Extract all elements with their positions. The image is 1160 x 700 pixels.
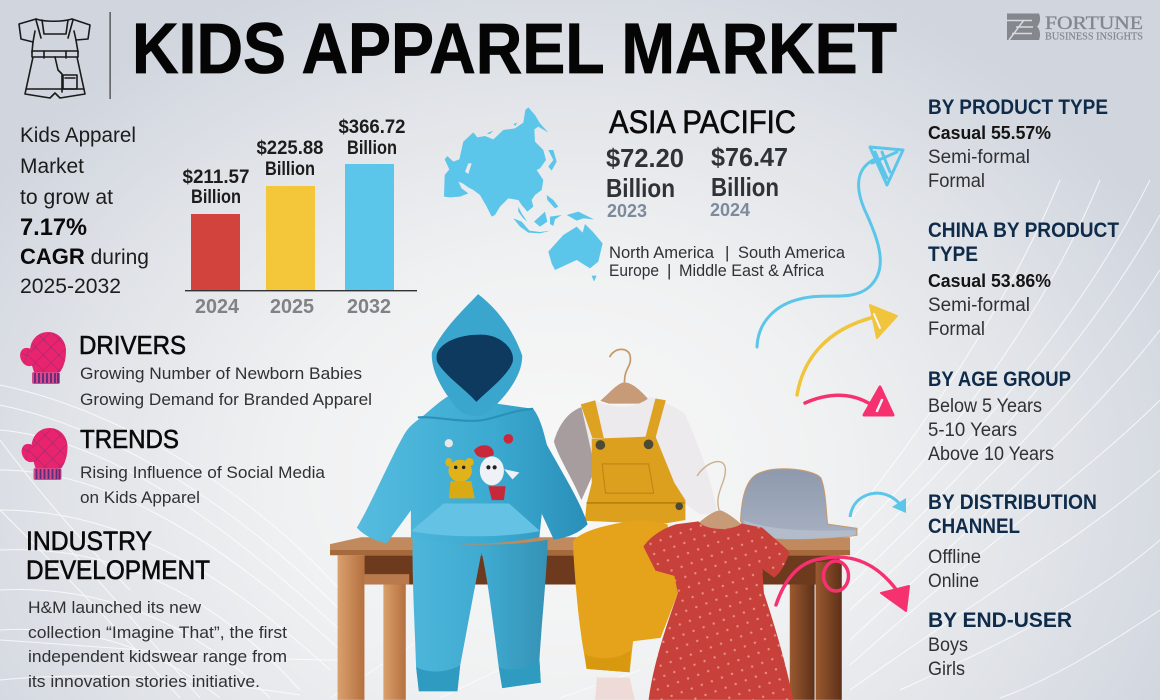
asia pacific 2024 value: 2024 xyxy=(710,200,750,220)
drivers text xyxy=(80,364,372,409)
segment: by age group: Above 10 Years xyxy=(928,444,1054,465)
industry development heading xyxy=(26,526,210,585)
CAGR text block: 2025-2032 xyxy=(20,275,121,298)
year labels: 2025 xyxy=(270,296,314,318)
other regions: South America xyxy=(738,243,846,262)
segment: by end-user: BY END-USER xyxy=(928,609,1072,632)
CAGR text block: Kids Apparel xyxy=(20,124,136,147)
segment: by end-user: Boys xyxy=(928,635,968,656)
other regions: Europe xyxy=(609,261,659,280)
segment: by distribution channel: Online xyxy=(928,571,979,592)
arrow: yellow to china by product type xyxy=(797,305,897,395)
arrow: pink to end-user xyxy=(776,557,909,611)
logo: Fortune Business Insights: BUSINESS INSIGHTS xyxy=(1045,32,1143,42)
year labels xyxy=(195,296,391,318)
segment: by age group xyxy=(928,368,1071,465)
other regions: | xyxy=(725,243,729,262)
arrow: pink to age group xyxy=(805,387,893,415)
asia pacific 2024 value: Billion xyxy=(711,172,779,202)
bar chart xyxy=(182,117,417,318)
industry development text: H&M launched its new xyxy=(28,598,202,617)
segment: by end-user xyxy=(928,609,1072,680)
asia pacific 2024 value xyxy=(710,142,788,220)
hanger: overalls xyxy=(600,349,649,404)
year labels: 2024 xyxy=(195,296,240,318)
other regions: | xyxy=(667,261,671,280)
segment: by product type xyxy=(928,96,1108,192)
logo: Fortune Business Insights: FORTUNE xyxy=(1045,13,1143,34)
red dress xyxy=(643,521,793,700)
asia pacific 2023 value: $72.20 xyxy=(606,143,684,173)
hat xyxy=(741,469,857,539)
industry development text: collection “Imagine That”, the first xyxy=(28,623,287,642)
value labels: $211.57 xyxy=(182,167,250,188)
icon: overalls outline xyxy=(19,19,90,98)
CAGR text block xyxy=(20,124,149,298)
asia pacific 2023 value: 2023 xyxy=(607,201,647,221)
asia pacific 2023 value xyxy=(606,143,684,221)
bar 2024 xyxy=(191,214,240,291)
shoe xyxy=(595,677,635,700)
overalls xyxy=(573,398,685,672)
industry development text xyxy=(28,598,287,691)
CAGR text block: to grow at xyxy=(20,186,113,209)
CAGR text block: Market xyxy=(20,155,84,178)
segment: china by product type: Formal xyxy=(928,319,985,340)
logo: Fortune Business Insights xyxy=(1007,13,1143,42)
trends text: Rising Influence of Social Media xyxy=(80,463,326,482)
asia pacific 2024 value: $76.47 xyxy=(711,142,788,172)
segment: by distribution channel: BY DISTRIBUTION xyxy=(928,491,1097,514)
value labels xyxy=(182,117,406,208)
drivers text: Growing Demand for Branded Apparel xyxy=(80,390,372,409)
other regions: Middle East & Africa xyxy=(679,261,825,280)
bench xyxy=(330,537,850,700)
axis xyxy=(185,290,417,291)
industry development heading: DEVELOPMENT xyxy=(26,555,210,585)
drivers heading: DRIVERS xyxy=(79,330,186,360)
asia pacific heading: ASIA PACIFIC xyxy=(609,104,796,140)
icon: mitten drivers xyxy=(17,332,66,384)
segment: by distribution channel: Offline xyxy=(928,547,981,568)
illustration: kids clothes on bench xyxy=(330,294,857,700)
segment: china by product type: TYPE xyxy=(928,243,978,266)
arrow: blue to distribution channel xyxy=(850,493,906,517)
year labels: 2032 xyxy=(347,296,391,318)
other regions: North America xyxy=(609,243,715,262)
segment: by product type: Formal xyxy=(928,171,985,192)
segment: by age group: BY AGE GROUP xyxy=(928,368,1071,391)
industry development heading: INDUSTRY xyxy=(26,526,152,556)
segment: by product type: BY PRODUCT TYPE xyxy=(928,96,1108,119)
segment: by end-user: Girls xyxy=(928,659,965,680)
value labels: $366.72 xyxy=(338,117,406,138)
segment: by age group: Below 5 Years xyxy=(928,396,1042,417)
map: Asia Pacific xyxy=(444,107,603,282)
segment: by product type: Semi-formal xyxy=(928,147,1030,168)
segment: china by product type: Casual 53.86% xyxy=(928,271,1051,291)
segment: china by product type: Semi-formal xyxy=(928,295,1030,316)
CAGR text block: 7.17% xyxy=(20,214,87,241)
trends heading: TRENDS xyxy=(80,424,179,454)
value labels: Billion xyxy=(347,138,397,159)
industry development text: its innovation stories initiative. xyxy=(28,672,260,691)
divider xyxy=(110,12,111,99)
drivers text: Growing Number of Newborn Babies xyxy=(80,364,362,383)
value labels: $225.88 xyxy=(256,138,324,159)
bar 2032 xyxy=(345,164,394,291)
trends text xyxy=(80,463,326,507)
icon: mitten trends xyxy=(19,428,67,480)
segment: by age group: 5-10 Years xyxy=(928,420,1017,441)
segment: by distribution channel: CHANNEL xyxy=(928,515,1020,538)
bar 2025 xyxy=(266,186,315,291)
segment: by product type: Casual 55.57% xyxy=(928,123,1051,143)
value labels: Billion xyxy=(265,159,315,180)
hoodie xyxy=(357,294,588,691)
other regions xyxy=(609,243,846,280)
industry development text: independent kidswear range from xyxy=(28,647,287,666)
hanger: dress xyxy=(697,462,742,529)
segment: by distribution channel xyxy=(928,491,1097,592)
title: KIDS APPAREL MARKET xyxy=(132,10,897,89)
arrow: blue to product type xyxy=(757,147,903,347)
asia pacific 2023 value: Billion xyxy=(606,173,675,203)
segment: china by product type: CHINA BY PRODUCT xyxy=(928,219,1119,242)
trends text: on Kids Apparel xyxy=(80,488,200,507)
CAGR text block: CAGR during xyxy=(20,244,149,269)
value labels: Billion xyxy=(191,187,241,208)
segment: china by product type xyxy=(928,219,1119,340)
white shirt xyxy=(554,397,717,515)
hoodie print xyxy=(445,434,519,500)
